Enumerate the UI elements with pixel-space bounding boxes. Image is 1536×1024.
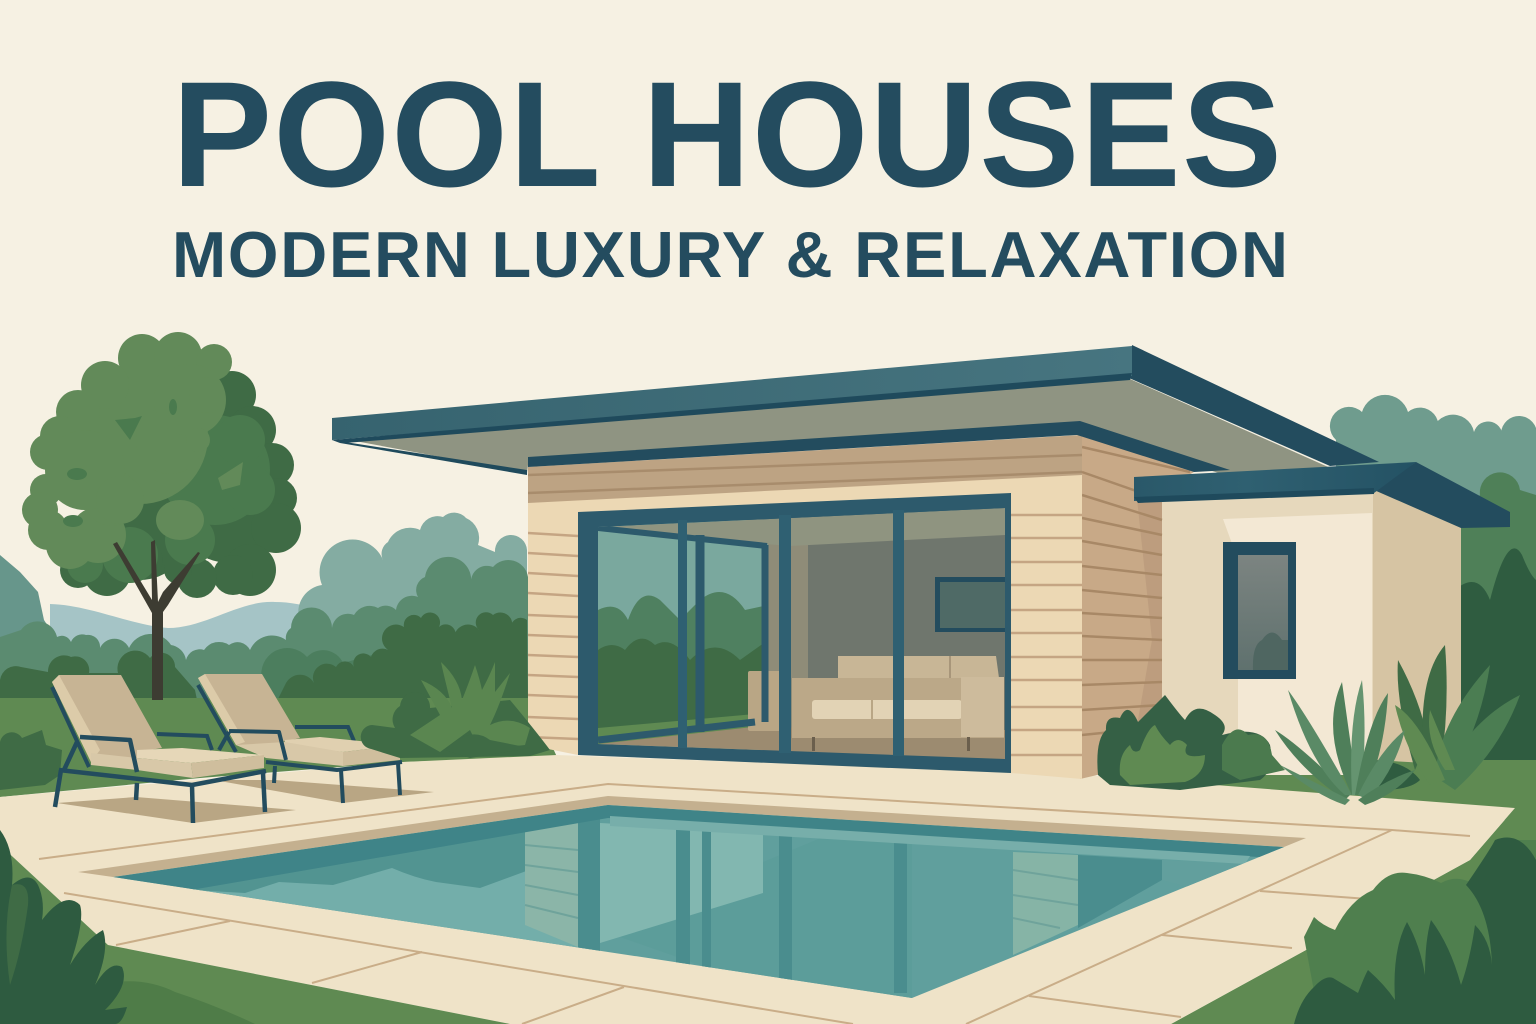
pool house: [332, 345, 1510, 779]
small roof underline: [1134, 488, 1374, 503]
main roof soffit: [355, 379, 1335, 475]
wall top dark band: [528, 421, 1230, 472]
tree canopy light: [22, 332, 232, 569]
annex front wall: [1162, 485, 1373, 775]
chair 1 strut: [52, 687, 89, 767]
lawn left: [0, 698, 557, 797]
far foliage at left edge: [0, 555, 57, 690]
door frame: [578, 493, 1011, 773]
right shrubs: [1097, 645, 1520, 805]
tall agave: [1395, 645, 1520, 790]
title: POOL HOUSES: [172, 50, 1282, 218]
main roof side edge: [1129, 345, 1379, 466]
light bush: [1120, 725, 1205, 785]
outside view through glass: [598, 520, 768, 750]
dark foliage layer: [275, 612, 528, 705]
agave: [1275, 680, 1415, 805]
deck surface: [0, 755, 1515, 1024]
shrub dark leaves: [0, 830, 127, 1024]
small roof fascia: [1134, 462, 1416, 501]
agave dark base: [1370, 760, 1420, 790]
chair 2 rear arm: [295, 727, 354, 741]
front wall: [528, 435, 1082, 779]
tree canopy mid: [67, 415, 275, 583]
chair 1 seat front: [91, 753, 193, 778]
wall art: [935, 577, 1007, 632]
front wall siding lines: [528, 455, 1082, 755]
right mid foliage: [1455, 472, 1536, 820]
trunk and branches: [113, 540, 200, 700]
left grass shadow: [90, 981, 255, 1024]
sofa: [748, 656, 1004, 751]
corner mullions: [598, 528, 767, 740]
roof dark underline: [332, 373, 1132, 475]
shrub leaves: [410, 662, 530, 752]
mid bush: [1222, 729, 1285, 780]
room back wall: [808, 535, 1005, 730]
chair 2 back cushion: [198, 674, 300, 760]
chair 1 rear arm: [157, 734, 212, 750]
ceiling: [598, 508, 1005, 546]
paving lines: [39, 784, 1470, 1024]
chair 2 strut: [198, 685, 236, 752]
door mullions: [678, 510, 904, 756]
lower foliage layer: [261, 648, 380, 710]
chair 2 seat front: [236, 742, 343, 766]
shrub mid leaves: [1304, 840, 1536, 1024]
middle foliage layer: [0, 557, 528, 705]
chair 1 seat top: [137, 748, 264, 763]
main roof fascia: [332, 346, 1132, 440]
distant hills: [50, 602, 330, 680]
left foreground shrub: [0, 830, 127, 1024]
annex right wall: [1373, 485, 1461, 765]
left foreground grass: [0, 845, 510, 1024]
chair 1: [52, 675, 296, 823]
chair 2 seat: [285, 737, 400, 752]
side wall shade: [1130, 480, 1162, 765]
shrub mid stripe: [6, 884, 28, 985]
pool: [78, 796, 1306, 1010]
water reflections: [113, 800, 1284, 1010]
pool water: [113, 805, 1284, 998]
dark foliage left: [0, 651, 198, 705]
sliding door: [578, 493, 1011, 773]
chair 2 shadow: [214, 780, 434, 803]
shrub dark base: [361, 692, 550, 758]
chair 1 shadow: [57, 797, 296, 823]
shrub dark accents: [445, 734, 530, 758]
floor: [598, 727, 1005, 760]
grass right of house: [1078, 760, 1536, 1024]
chair 2: [198, 674, 434, 803]
interior view: [598, 508, 1008, 760]
chair 1 back cushion: [52, 675, 162, 770]
room side wall: [768, 544, 808, 728]
small roof side: [1374, 462, 1510, 528]
background landscape: [0, 395, 1536, 1024]
tree light patches: [156, 462, 243, 540]
annex light patch: [1223, 513, 1372, 775]
chair 1 cushion edge: [52, 675, 100, 762]
far foliage right of tree: [298, 513, 527, 700]
right foreground shrub: [1294, 838, 1536, 1024]
dark bush: [1097, 695, 1271, 790]
right dark foliage: [1455, 548, 1536, 820]
front wall shadow band: [528, 435, 1082, 503]
shrub by house left: [361, 662, 550, 758]
pool lip: [78, 796, 1306, 877]
tree: [22, 332, 301, 700]
tree shadow holes: [63, 399, 177, 527]
side wall siding lines: [1082, 447, 1190, 735]
back right foliage: [1330, 395, 1536, 560]
low shrub left: [0, 730, 62, 790]
annex window: [1223, 542, 1296, 679]
tree canopy dark: [60, 371, 301, 598]
subtitle: MODERN LUXURY & RELAXATION: [172, 218, 1288, 291]
shrub dark leaves: [1294, 838, 1536, 1024]
chair 2 cushion edge: [198, 674, 245, 745]
chair 2 seat side: [343, 745, 400, 766]
deck: [0, 755, 1515, 1024]
side wall: [1080, 435, 1194, 779]
chair 1 frame: [55, 737, 266, 823]
chair 1 seat side: [191, 755, 264, 778]
chair 2 frame: [219, 731, 402, 803]
